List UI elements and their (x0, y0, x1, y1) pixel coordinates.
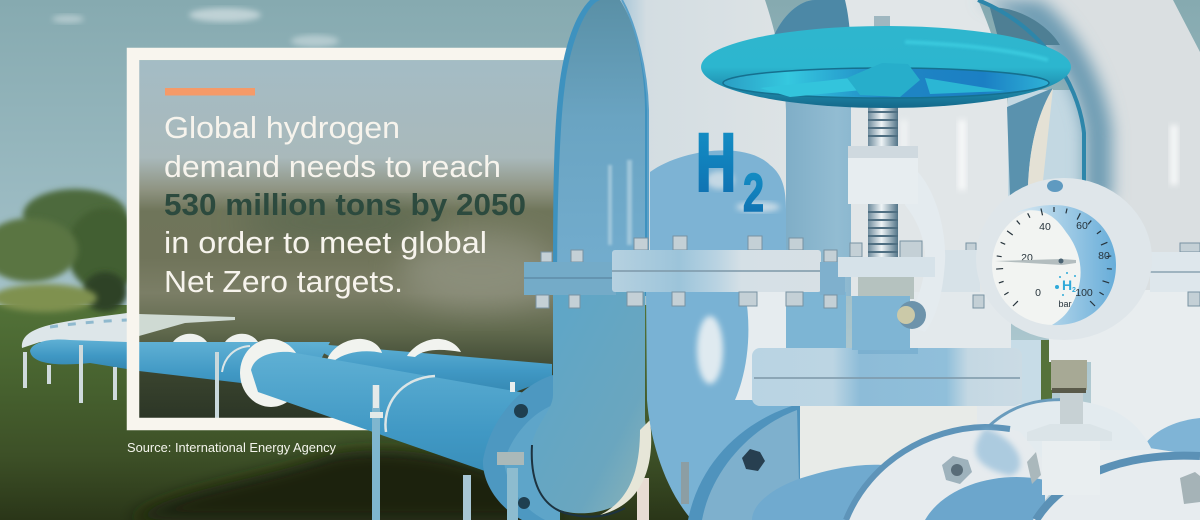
gauge needle pivot (1058, 258, 1064, 264)
support post stub (510, 382, 515, 392)
front flange (612, 250, 821, 292)
lit area on pipe (735, 292, 790, 400)
long pipelines (240, 339, 556, 520)
gauge numbers: 80 (1098, 250, 1110, 262)
logo: H2 on pipe: 2 (743, 163, 764, 223)
arch two tube (845, 0, 1008, 296)
center flange (846, 427, 1060, 520)
inner column (858, 277, 914, 299)
logo: H2 on pipe: H (696, 118, 736, 208)
headline text: in order to meet global (164, 226, 487, 260)
wheel highlight (905, 42, 1048, 60)
neck shadow body (752, 465, 910, 520)
rear long pipe (305, 343, 552, 394)
headline text: Net Zero targets. (164, 265, 403, 299)
right back flanges (820, 262, 845, 295)
far pipeline inside frame (139, 314, 235, 336)
diagonal flange left (688, 404, 800, 520)
second lower pipe (646, 290, 796, 520)
pale post (637, 478, 649, 520)
headline text: Global hydrogen (164, 111, 400, 145)
front flange ring (240, 339, 302, 407)
yoke plate (838, 257, 935, 277)
neck (795, 402, 977, 482)
gauge top screw (1047, 180, 1063, 192)
main front pipe (251, 352, 556, 500)
pressure gauge (976, 178, 1152, 495)
right pipe highlight (1170, 125, 1178, 185)
arch two blue interior (772, 0, 880, 296)
source note: Source: International Energy Agency (127, 440, 336, 455)
tube rim (622, 0, 648, 296)
arch three tube (978, 0, 1200, 300)
valve bottom flange (752, 348, 1022, 406)
upper spring (868, 95, 898, 147)
arch two highlights (958, 120, 966, 190)
gauge numbers: 0 (1035, 287, 1041, 299)
large pipes: arches and verticals (553, 0, 1200, 300)
elbow pipe flange (483, 375, 649, 520)
wheel opening (723, 68, 1049, 98)
mid pipe pole (215, 352, 219, 418)
gauge H2 mark: H (1062, 277, 1072, 293)
flange disc two (407, 339, 461, 357)
arch three shading (978, 0, 1112, 200)
dark grass shadow (130, 450, 560, 520)
behind valve blue (786, 292, 846, 352)
lower elbow (532, 290, 648, 513)
flange discs behind (173, 334, 207, 342)
collar block (848, 146, 918, 159)
accent bar (165, 88, 255, 96)
panel frame (133, 54, 570, 424)
lower bolts (536, 292, 1200, 308)
gauge housing (976, 178, 1152, 340)
ball joint (898, 301, 926, 329)
wheel left spoke (760, 78, 862, 97)
gauge needle (995, 259, 1076, 265)
headline text: 530 million tons by 2050 (164, 188, 526, 222)
space between arches (1008, 90, 1088, 296)
panel: blurred text backdrop (139, 61, 564, 418)
back flange (524, 262, 616, 295)
yoke arm (905, 165, 945, 332)
gauge numbers: 60 (1076, 220, 1088, 232)
wheel hub (847, 63, 920, 97)
gauge H2 mark (1055, 272, 1076, 296)
gauge numbers (1021, 220, 1110, 309)
mid pipe (139, 342, 330, 400)
upper bolts (541, 236, 1200, 262)
gauge ticks (996, 207, 1112, 306)
lower spring (868, 203, 898, 259)
arch one tube (620, 0, 786, 296)
pale rod (681, 462, 689, 504)
bottom right flange (1033, 452, 1200, 520)
gauge H2 mark: 2 (1072, 287, 1076, 294)
bolts (942, 456, 972, 484)
band clamp (385, 376, 435, 432)
stem top pin (874, 16, 890, 30)
handwheel (701, 26, 1071, 108)
gauge numbers: 100 (1075, 287, 1093, 299)
wheel right spoke (925, 78, 1005, 94)
gauge numbers: 40 (1039, 221, 1051, 233)
lower pipes and valve body (532, 290, 1200, 520)
gauge face (992, 205, 1116, 325)
mid pipe clamp (222, 346, 250, 372)
headline text (164, 111, 526, 299)
gauge numbers: 20 (1021, 252, 1033, 264)
tube shadow (650, 150, 786, 296)
far pipeline outside frame (22, 313, 127, 348)
support poles (372, 385, 380, 520)
arch three rim (978, 0, 1084, 190)
flange assembly (524, 236, 1200, 308)
rear right flange (960, 400, 1152, 520)
flange disc one (327, 339, 382, 361)
white pipe behind valve (905, 292, 1011, 352)
valve stem assembly (838, 16, 945, 350)
bolt left (742, 449, 765, 471)
gauge numbers: bar (1058, 299, 1072, 309)
arch one inner (557, 0, 645, 296)
arch one rim (553, 0, 650, 296)
arch three hollow (990, 8, 1060, 45)
headline text: demand needs to reach (164, 150, 501, 184)
gauge stem (1049, 335, 1091, 362)
